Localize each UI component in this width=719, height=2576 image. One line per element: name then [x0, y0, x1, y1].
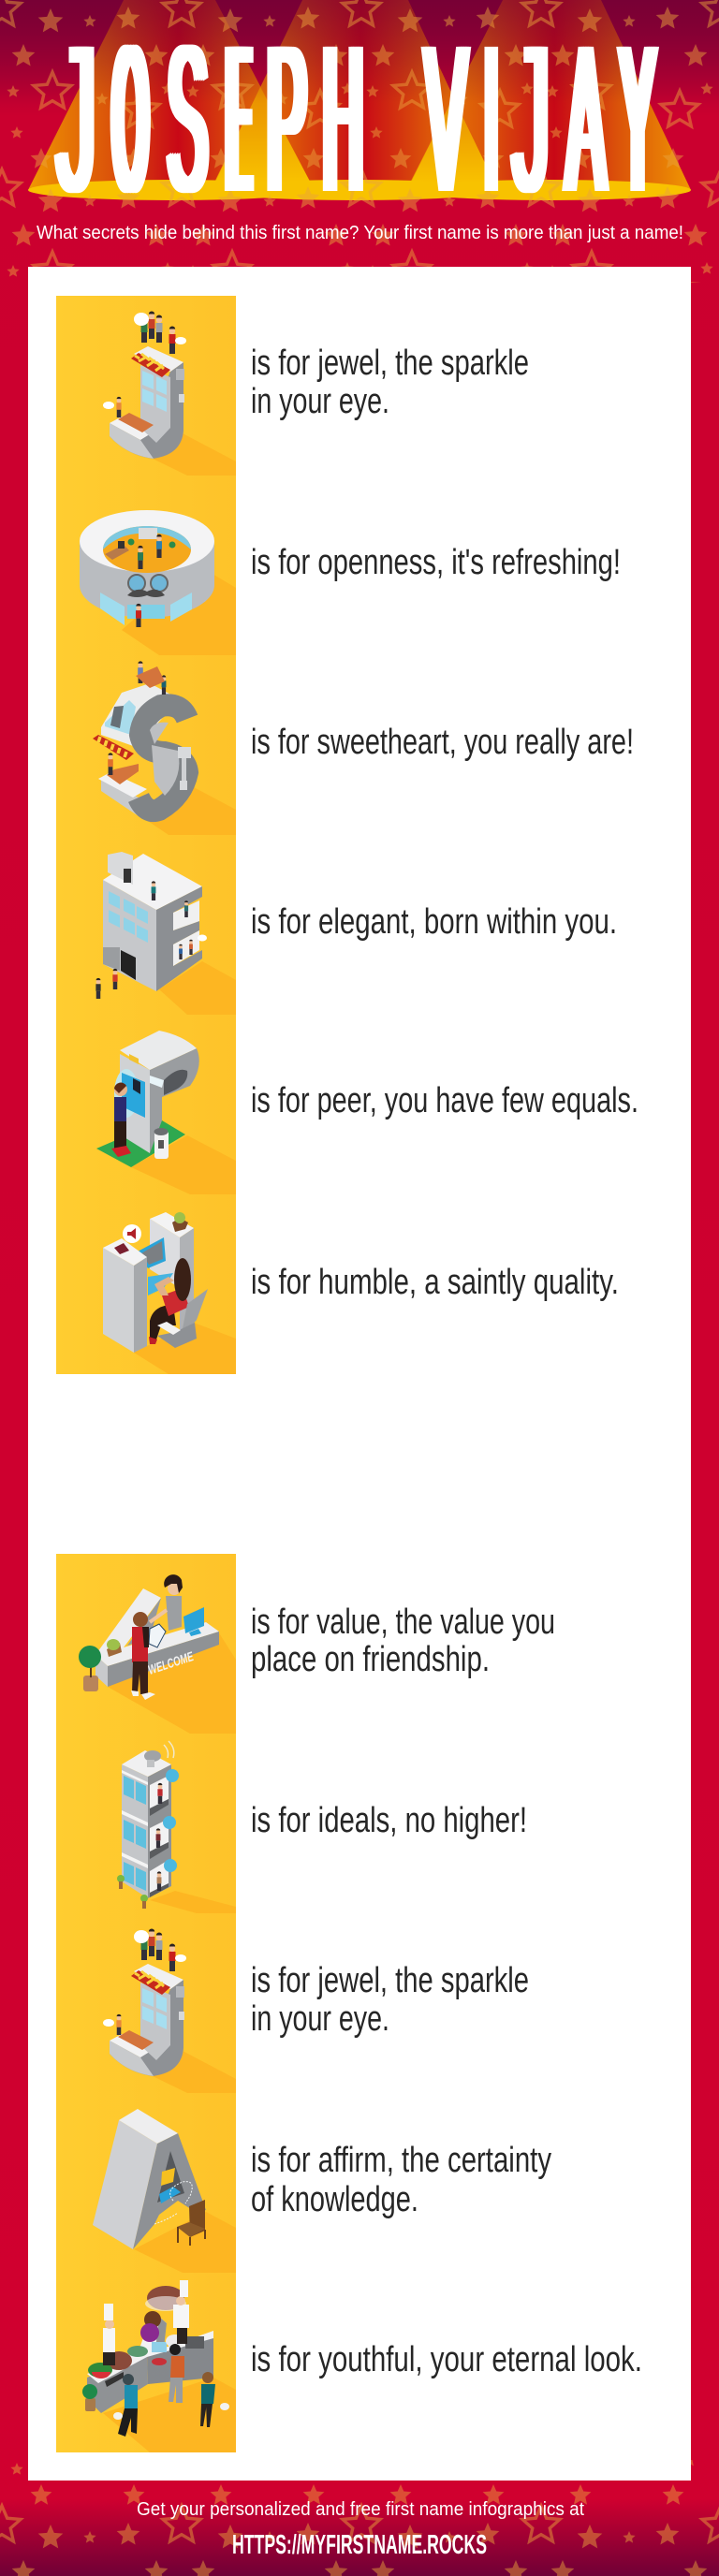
icon: letter O optician — [80, 510, 236, 655]
panel: yellow column two — [56, 1554, 236, 2452]
text: O: is for openness, it's refreshing! — [251, 543, 621, 582]
row: Y youthful — [82, 2280, 642, 2452]
icon: letter J building — [103, 311, 236, 476]
panel: yellow column one — [56, 296, 236, 1374]
row: S sweetheart — [93, 661, 634, 835]
title: J — [512, 2, 550, 236]
row: H humble — [103, 1212, 619, 1374]
star pattern: top — [0, 0, 719, 283]
title: O — [113, 2, 148, 236]
title: V — [425, 2, 467, 236]
text: E: is for elegant, born within you. — [251, 902, 617, 942]
icon: letter S office — [93, 661, 236, 835]
icon: letter J building repeated — [103, 1928, 236, 2093]
footer: call to action: Get your personalized and free first name infographics at — [137, 2499, 584, 2520]
title: S — [168, 2, 208, 236]
icon: letter V welcome desk — [79, 1574, 236, 1734]
icon: letter I tower — [117, 1741, 236, 1913]
row: E elegant — [95, 852, 617, 1015]
star pattern: bottom — [0, 2460, 719, 2576]
text: A: of knowledge. — [251, 2180, 418, 2219]
text: A: is for affirm, the certainty — [251, 2141, 551, 2180]
text: J: is for jewel, the sparkle — [251, 344, 529, 383]
panel: white content card — [28, 267, 691, 2481]
row: V value — [79, 1574, 555, 1734]
text: J repeated: is for jewel, the sparkle — [251, 1961, 529, 2000]
text: J repeated: in your eye. — [251, 1999, 389, 2039]
title — [54, 2, 659, 236]
icon: letter V welcome desk: WELCOME — [146, 1648, 196, 1677]
icon: letter Y buffet — [82, 2280, 236, 2452]
footer: url: HTTPS://MYFIRSTNAME.ROCKS — [232, 2530, 487, 2560]
icon: letter P ATM — [96, 1031, 236, 1194]
row: I ideals — [117, 1741, 527, 1913]
row: P peer — [96, 1031, 638, 1194]
title: I — [471, 2, 512, 236]
title: H — [323, 2, 363, 236]
subtitle: What secrets hide behind this first name? Your first name is more than just a name! — [37, 223, 683, 243]
title: P — [267, 2, 307, 236]
text: J: in your eye. — [251, 382, 389, 421]
icon: letter A study — [93, 2109, 236, 2273]
text: I: is for ideals, no higher! — [251, 1801, 527, 1840]
icon: letter H desk — [103, 1212, 236, 1374]
title: A — [566, 2, 605, 236]
row: J jewel repeated — [103, 1928, 529, 2093]
row: J jewel — [103, 311, 529, 476]
title: Y — [620, 2, 655, 236]
text: V: is for value, the value you — [251, 1603, 555, 1642]
text: H: is for humble, a saintly quality. — [251, 1263, 619, 1302]
title: E — [227, 2, 250, 236]
icon: letter E building — [95, 852, 236, 1015]
row: O openness — [80, 510, 621, 655]
text: V: place on friendship. — [251, 1640, 490, 1679]
title: J — [56, 2, 96, 236]
spotlights: three yellow cones — [0, 0, 719, 200]
row: A affirm — [93, 2109, 551, 2273]
